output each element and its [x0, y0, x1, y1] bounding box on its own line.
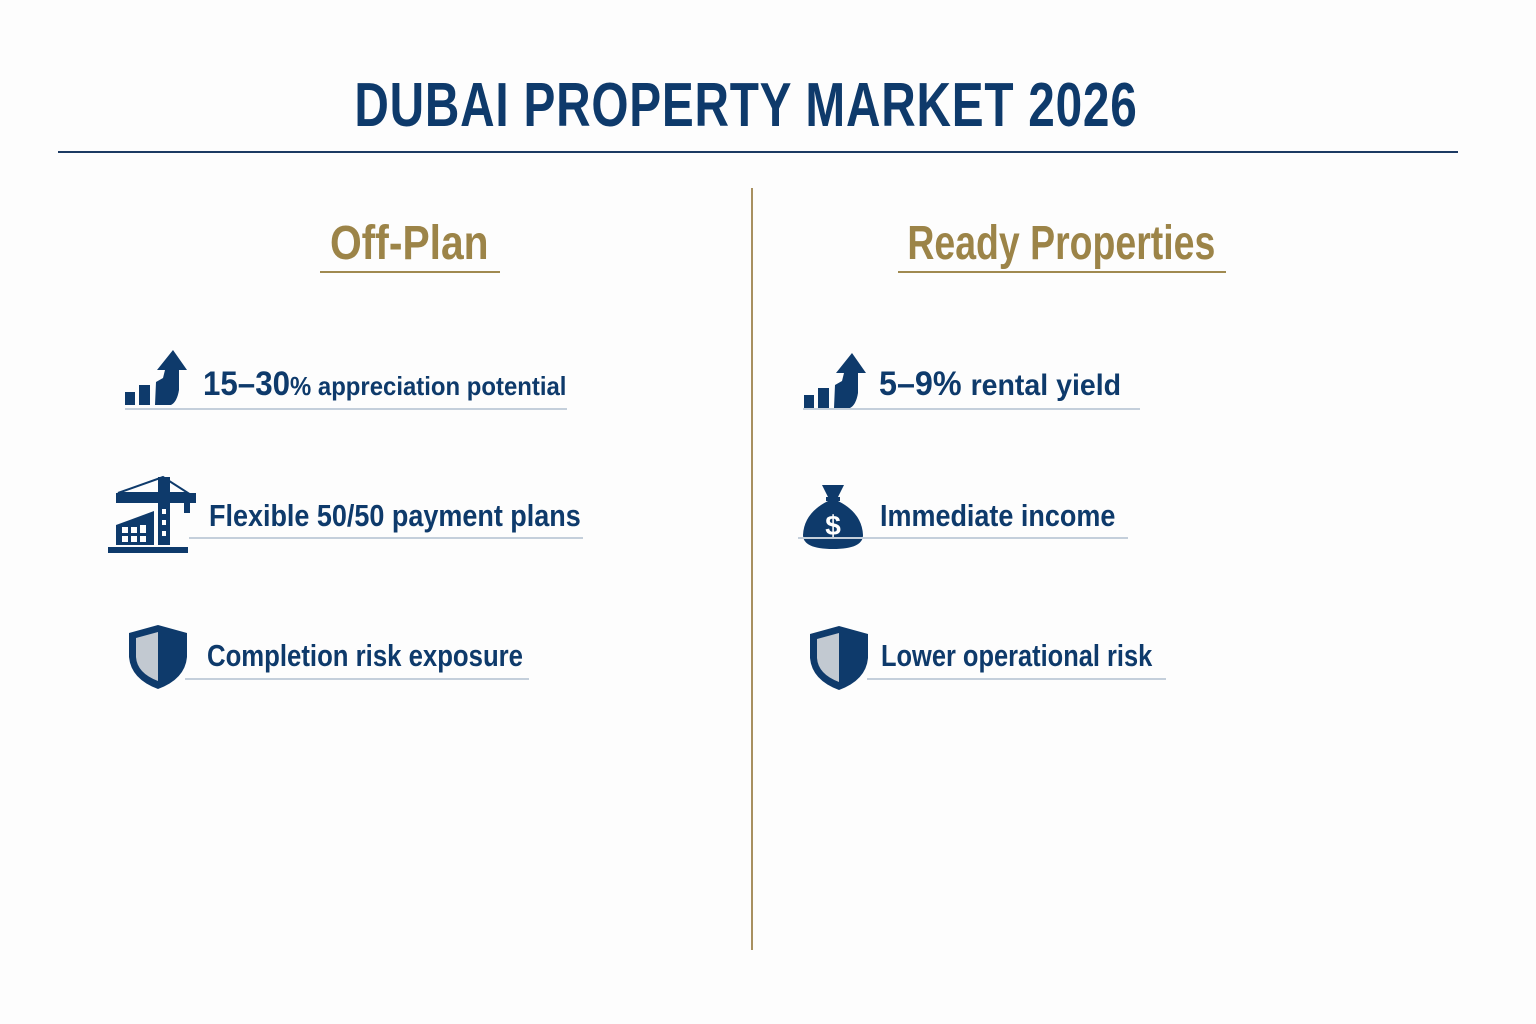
heading: Off-Plan: Off-Plan [330, 217, 489, 270]
icon: shield [810, 626, 868, 690]
panel: off-plan [108, 350, 583, 689]
icon: crane building [108, 476, 196, 553]
icon: money bag: $ [825, 510, 841, 541]
text: lower risk: Lower operational risk [881, 638, 1152, 673]
text: rental yield: 5–9% rental yield [879, 365, 1121, 403]
text: payment plans: Flexible 50/50 payment plans [209, 498, 581, 533]
icon: growth chart [804, 353, 866, 408]
text: completion risk: Completion risk exposure [207, 638, 523, 673]
icon: growth chart [125, 350, 187, 405]
divider [751, 188, 753, 950]
text: immediate income: Immediate income [880, 498, 1115, 533]
panel: ready [798, 353, 1166, 690]
text: appreciation: 15–30% appreciation potential [203, 365, 566, 403]
icon: shield [129, 625, 187, 689]
icon: money bag [803, 485, 863, 549]
title: DUBAI PROPERTY MARKET 2026 [354, 71, 1138, 140]
heading: Ready Properties: Ready Properties [907, 217, 1215, 270]
